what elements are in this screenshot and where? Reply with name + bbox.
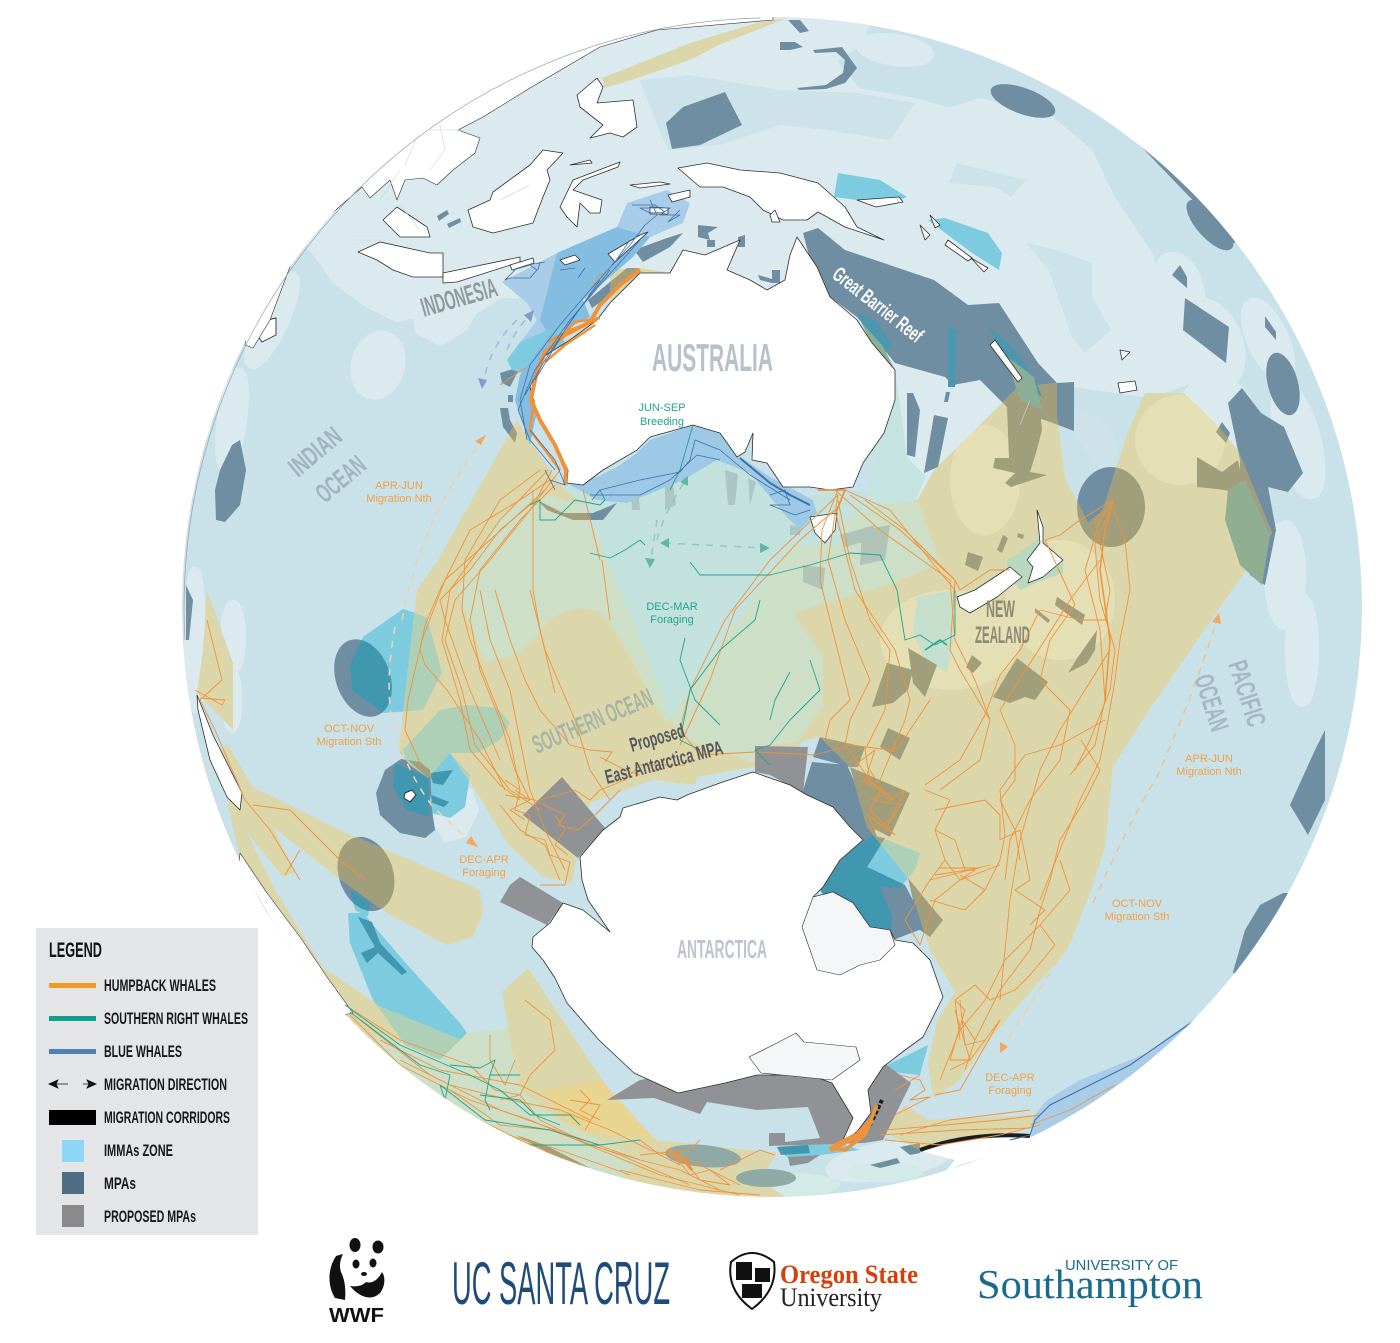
Kerguelen plateau green blob [400, 705, 510, 778]
arrow east north [1093, 620, 1217, 903]
legend item: blue whales [49, 1042, 182, 1061]
Australia [530, 237, 895, 490]
Timor and smaller islands [510, 160, 1137, 393]
infographic canvas: ZEALAND [975, 622, 1030, 649]
legend panel [36, 928, 258, 1235]
infographic canvas: UC SANTA CRUZ [452, 1250, 670, 1317]
label: Proposed East Antarctica MPA: Proposed [627, 720, 687, 757]
MPA inside corridors [338, 268, 1272, 1168]
proposed MPAs [500, 746, 911, 1166]
Tongan green zone [1225, 480, 1270, 585]
callout: JUN-SEP Breeding: JUN-SEP [638, 402, 686, 414]
callout: APR-JUN west: Migration Nth [366, 493, 432, 505]
Sri Lanka [255, 318, 276, 342]
Africa limb strip [239, 853, 353, 1015]
New Britain [857, 197, 903, 207]
coral sea pale zone [868, 368, 926, 500]
migration direction arrows [389, 314, 1217, 1048]
Asia mainland [332, 17, 774, 214]
legend item: southern right whales [49, 1009, 248, 1028]
humpback whale tracks [195, 270, 1130, 1195]
arrow Tasman south [1002, 937, 1073, 1048]
South lower-left tracks [345, 1005, 720, 1190]
Southern right whale zone [560, 455, 867, 718]
callout: DEC-APR west: DEC-APR [459, 854, 509, 866]
legend item: MPAs: MPAs [104, 1174, 136, 1193]
thick western Australia bundle [531, 270, 640, 485]
arrow OCT-NOV west [389, 627, 472, 843]
legend heading: LEGEND [49, 939, 102, 962]
callout: DEC-MAR Foraging: DEC-MAR [646, 601, 698, 613]
southern right whale tracks [345, 425, 955, 1145]
legend item: IMMAs zone: IMMAs ZONE [104, 1141, 173, 1160]
legend item: migration direction [49, 1075, 227, 1094]
New Zealand north island [1027, 510, 1063, 583]
label: Pacific Ocean: PACIFIC [1222, 657, 1272, 731]
legend item: migration corridors [49, 1108, 230, 1127]
label: Australia: AUSTRALIA [652, 337, 773, 380]
South American coast black [920, 1135, 1030, 1150]
label: Proposed East Antarctica MPA [603, 720, 725, 789]
legend item: proposed MPAs [62, 1205, 196, 1227]
blue whale tracks [505, 200, 1195, 1140]
New Caledonia green and teal bands [857, 313, 1042, 410]
Tasmania [810, 513, 837, 543]
land masses [197, 0, 1137, 1172]
lighter corridor patches [544, 395, 1225, 1140]
Madagascar [197, 695, 242, 810]
label: Southern Ocean: SOUTHERN OCEAN [528, 682, 657, 760]
south coast bottom [830, 1120, 872, 1150]
callout: OCT-NOV west: Migration Sth [317, 736, 381, 748]
Malay [383, 207, 430, 237]
blue arrows [483, 314, 531, 384]
logo: University of Southampton: UNIVERSITY OF [1065, 1257, 1178, 1274]
legend item: migration corridors: MIGRATION CORRIDORS [104, 1108, 230, 1127]
callout: OCT-NOV east: OCT-NOV [1112, 898, 1163, 910]
label: Pacific Ocean: OCEAN [1188, 671, 1235, 735]
New Guinea [678, 163, 884, 240]
label: Pacific Ocean [1188, 657, 1272, 735]
track along Madagascar and band [200, 620, 365, 880]
teal arrows [650, 480, 765, 565]
overlap zones: green corridor overlays [373, 490, 955, 1200]
label: Indian Ocean: OCEAN [310, 450, 372, 509]
Bight MPA strips [630, 470, 890, 590]
label: New Zealand [975, 596, 1030, 649]
South America tip [924, 1136, 1032, 1170]
arrowheads [466, 310, 1221, 1053]
legend item: blue whales: BLUE WHALES [104, 1042, 182, 1061]
logo: Oregon State University: University [780, 1283, 882, 1312]
IMMA zones [348, 173, 1002, 1160]
callout: DEC-APR east: DEC-APR [985, 1072, 1035, 1084]
legend item: humpback whales: HUMPBACK WHALES [104, 976, 216, 995]
peninsula dark islands [835, 1100, 882, 1148]
logo: University of Southampton: Southampton [977, 1261, 1203, 1307]
callout: OCT-NOV east: Migration Sth [1105, 911, 1169, 923]
legend item: southern right whales: SOUTHERN RIGHT WHALES [104, 1009, 248, 1028]
China borders [350, 110, 1030, 425]
callout: DEC-APR west: Foraging [462, 867, 506, 879]
Tasmania fan tracks [818, 490, 845, 515]
Kerguelen [404, 790, 416, 802]
ocean [182, 17, 1362, 1197]
Ross ice shelf [802, 892, 895, 975]
New Zealand south island [957, 567, 1022, 613]
Java Sumatra [358, 242, 443, 277]
IMMA within MPA overlap [350, 640, 904, 1155]
Marine protected areas [186, 20, 1325, 1168]
Ronne ice shelf [749, 1033, 860, 1080]
label: Great Barrier Reef: Great Barrier Reef [828, 263, 928, 348]
globe map [182, 0, 1362, 1200]
callout: APR-JUN east: APR-JUN [1185, 753, 1233, 765]
Antarctica east cluster [845, 745, 905, 835]
humpback migration corridors [197, 18, 1272, 1200]
label: Indian Ocean [283, 421, 372, 509]
callout: DEC-APR east: Foraging [988, 1085, 1032, 1097]
label: Indian Ocean: INDIAN [283, 421, 348, 483]
logo: Oregon State University: Oregon State [780, 1260, 918, 1289]
Blue whale habitat zones [502, 190, 1197, 1140]
legend item: MPAs [62, 1172, 136, 1194]
Sulawesi [560, 162, 620, 227]
WWF wordmark: WWF [329, 1305, 384, 1327]
globe rim lines [184, 18, 760, 640]
darker channels between zones [640, 75, 1111, 353]
Philippines [577, 78, 637, 138]
label: Proposed East Antarctica MPA: East Antarctica MPA [603, 737, 725, 789]
callout: APR-JUN west: APR-JUN [375, 480, 423, 492]
New Zealand halo [1007, 537, 1063, 590]
India tip [245, 205, 322, 348]
Antarctica [532, 772, 943, 1140]
Kermadec bundle [1100, 500, 1113, 700]
callout: APR-JUN east: Migration Nth [1176, 766, 1242, 778]
label: New Zealand: NEW [986, 596, 1015, 623]
legend item: humpback whales [49, 976, 216, 995]
legend item: migration direction: MIGRATION DIRECTION [104, 1075, 227, 1094]
arrow APR-JUN west [402, 440, 483, 620]
Borneo [468, 150, 563, 233]
label: Indonesia: INDONESIA [417, 272, 501, 323]
callout: JUN-SEP Breeding: Breeding [640, 416, 684, 428]
callout: OCT-NOV west: OCT-NOV [324, 723, 375, 735]
bottom MPA ellipses [664, 1142, 796, 1187]
callout: DEC-MAR Foraging: Foraging [650, 614, 694, 626]
exclusive economic zones [189, 0, 1330, 1184]
bottom pale zones [771, 1162, 923, 1197]
Lesser Sunda [443, 257, 520, 283]
logo: Oregon State University [730, 1253, 918, 1312]
legend item: IMMAs zone [62, 1140, 173, 1162]
logo: WWF panda [329, 1238, 384, 1327]
shield [730, 1253, 775, 1309]
legend item: proposed MPAs: PROPOSED MPAs [104, 1207, 196, 1226]
IMMA inside corridors [375, 613, 920, 1060]
label: Antarctica: ANTARCTICA [677, 934, 767, 964]
